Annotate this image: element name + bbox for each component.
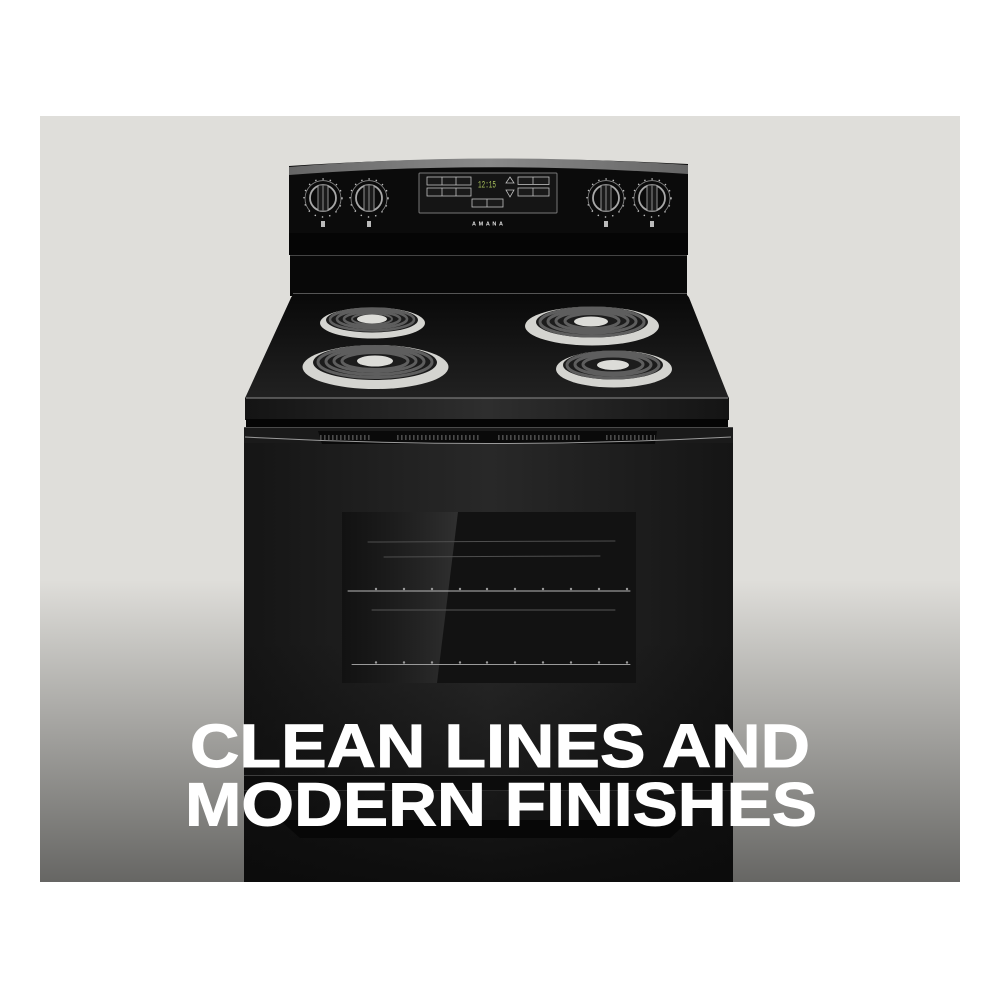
title: CLEAN LINES AND [190,712,810,780]
display panel [419,173,557,213]
icon: stove appliance [244,158,733,882]
burner: front right [556,350,672,388]
drawer handle shadow [280,820,690,838]
oven racks [348,541,630,664]
bottom gradient overlay [40,580,960,882]
title [185,712,817,838]
title: MODERN FINISHES [185,770,817,838]
backguard control console [289,158,688,296]
cooktop front lip [245,398,729,420]
burner: back left [320,308,425,338]
burner: front left [302,345,448,389]
oven control knobs [304,179,671,227]
cooktop surface [245,294,729,398]
oven body and door [244,427,733,882]
burner: back right [525,306,659,346]
door handle vent [245,431,731,444]
brand name: AMANA [472,222,503,228]
clock readout: 12:15 [478,180,496,192]
background panel [40,116,960,882]
drawer seam [244,774,733,776]
oven window [342,512,636,683]
